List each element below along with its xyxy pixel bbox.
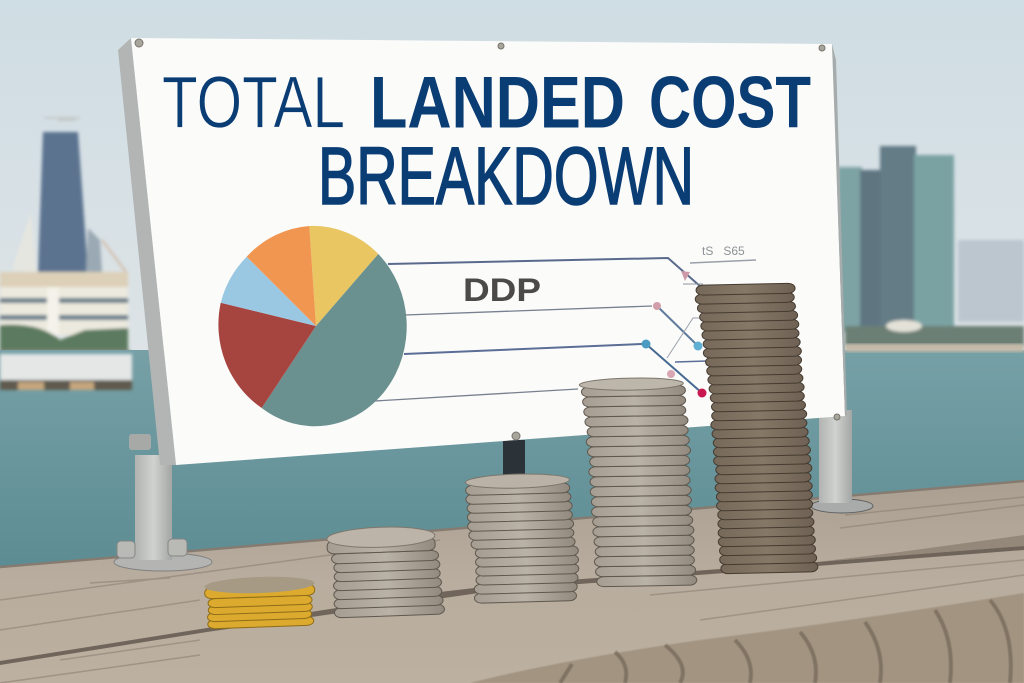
- wooden deck: [0, 481, 1024, 683]
- title: BREAKDOWN: [318, 131, 694, 222]
- skyline: right towers: [838, 146, 1024, 346]
- left sign post: [114, 434, 212, 571]
- small value label: tS S65: [702, 244, 745, 258]
- board right edge: [832, 44, 847, 416]
- coin stack 5: [695, 283, 818, 574]
- center sign post: [503, 440, 525, 475]
- skyline: left buildings: [0, 118, 130, 354]
- coin stack 3: [465, 473, 580, 603]
- board screws: [135, 39, 840, 440]
- board side edge: [118, 38, 176, 465]
- title: [162, 62, 811, 222]
- DDP label: DDP: [463, 272, 541, 308]
- timber rail at bottom right: [470, 593, 1024, 683]
- coin stack 1: gold: [204, 575, 316, 629]
- pier: [0, 354, 132, 390]
- title: TOTAL: [162, 62, 345, 144]
- right sign post: [811, 410, 873, 513]
- pie chart: [218, 226, 407, 426]
- white sign board: [131, 38, 845, 465]
- water: [0, 350, 1024, 570]
- sky background: [0, 0, 1024, 400]
- title: LANDED: [370, 62, 625, 144]
- right shoreline: [845, 344, 1024, 352]
- coin stack 2: [327, 525, 445, 618]
- leader lines and dots: [375, 258, 756, 401]
- title: COST: [649, 62, 811, 144]
- coin stack 4: [579, 377, 697, 587]
